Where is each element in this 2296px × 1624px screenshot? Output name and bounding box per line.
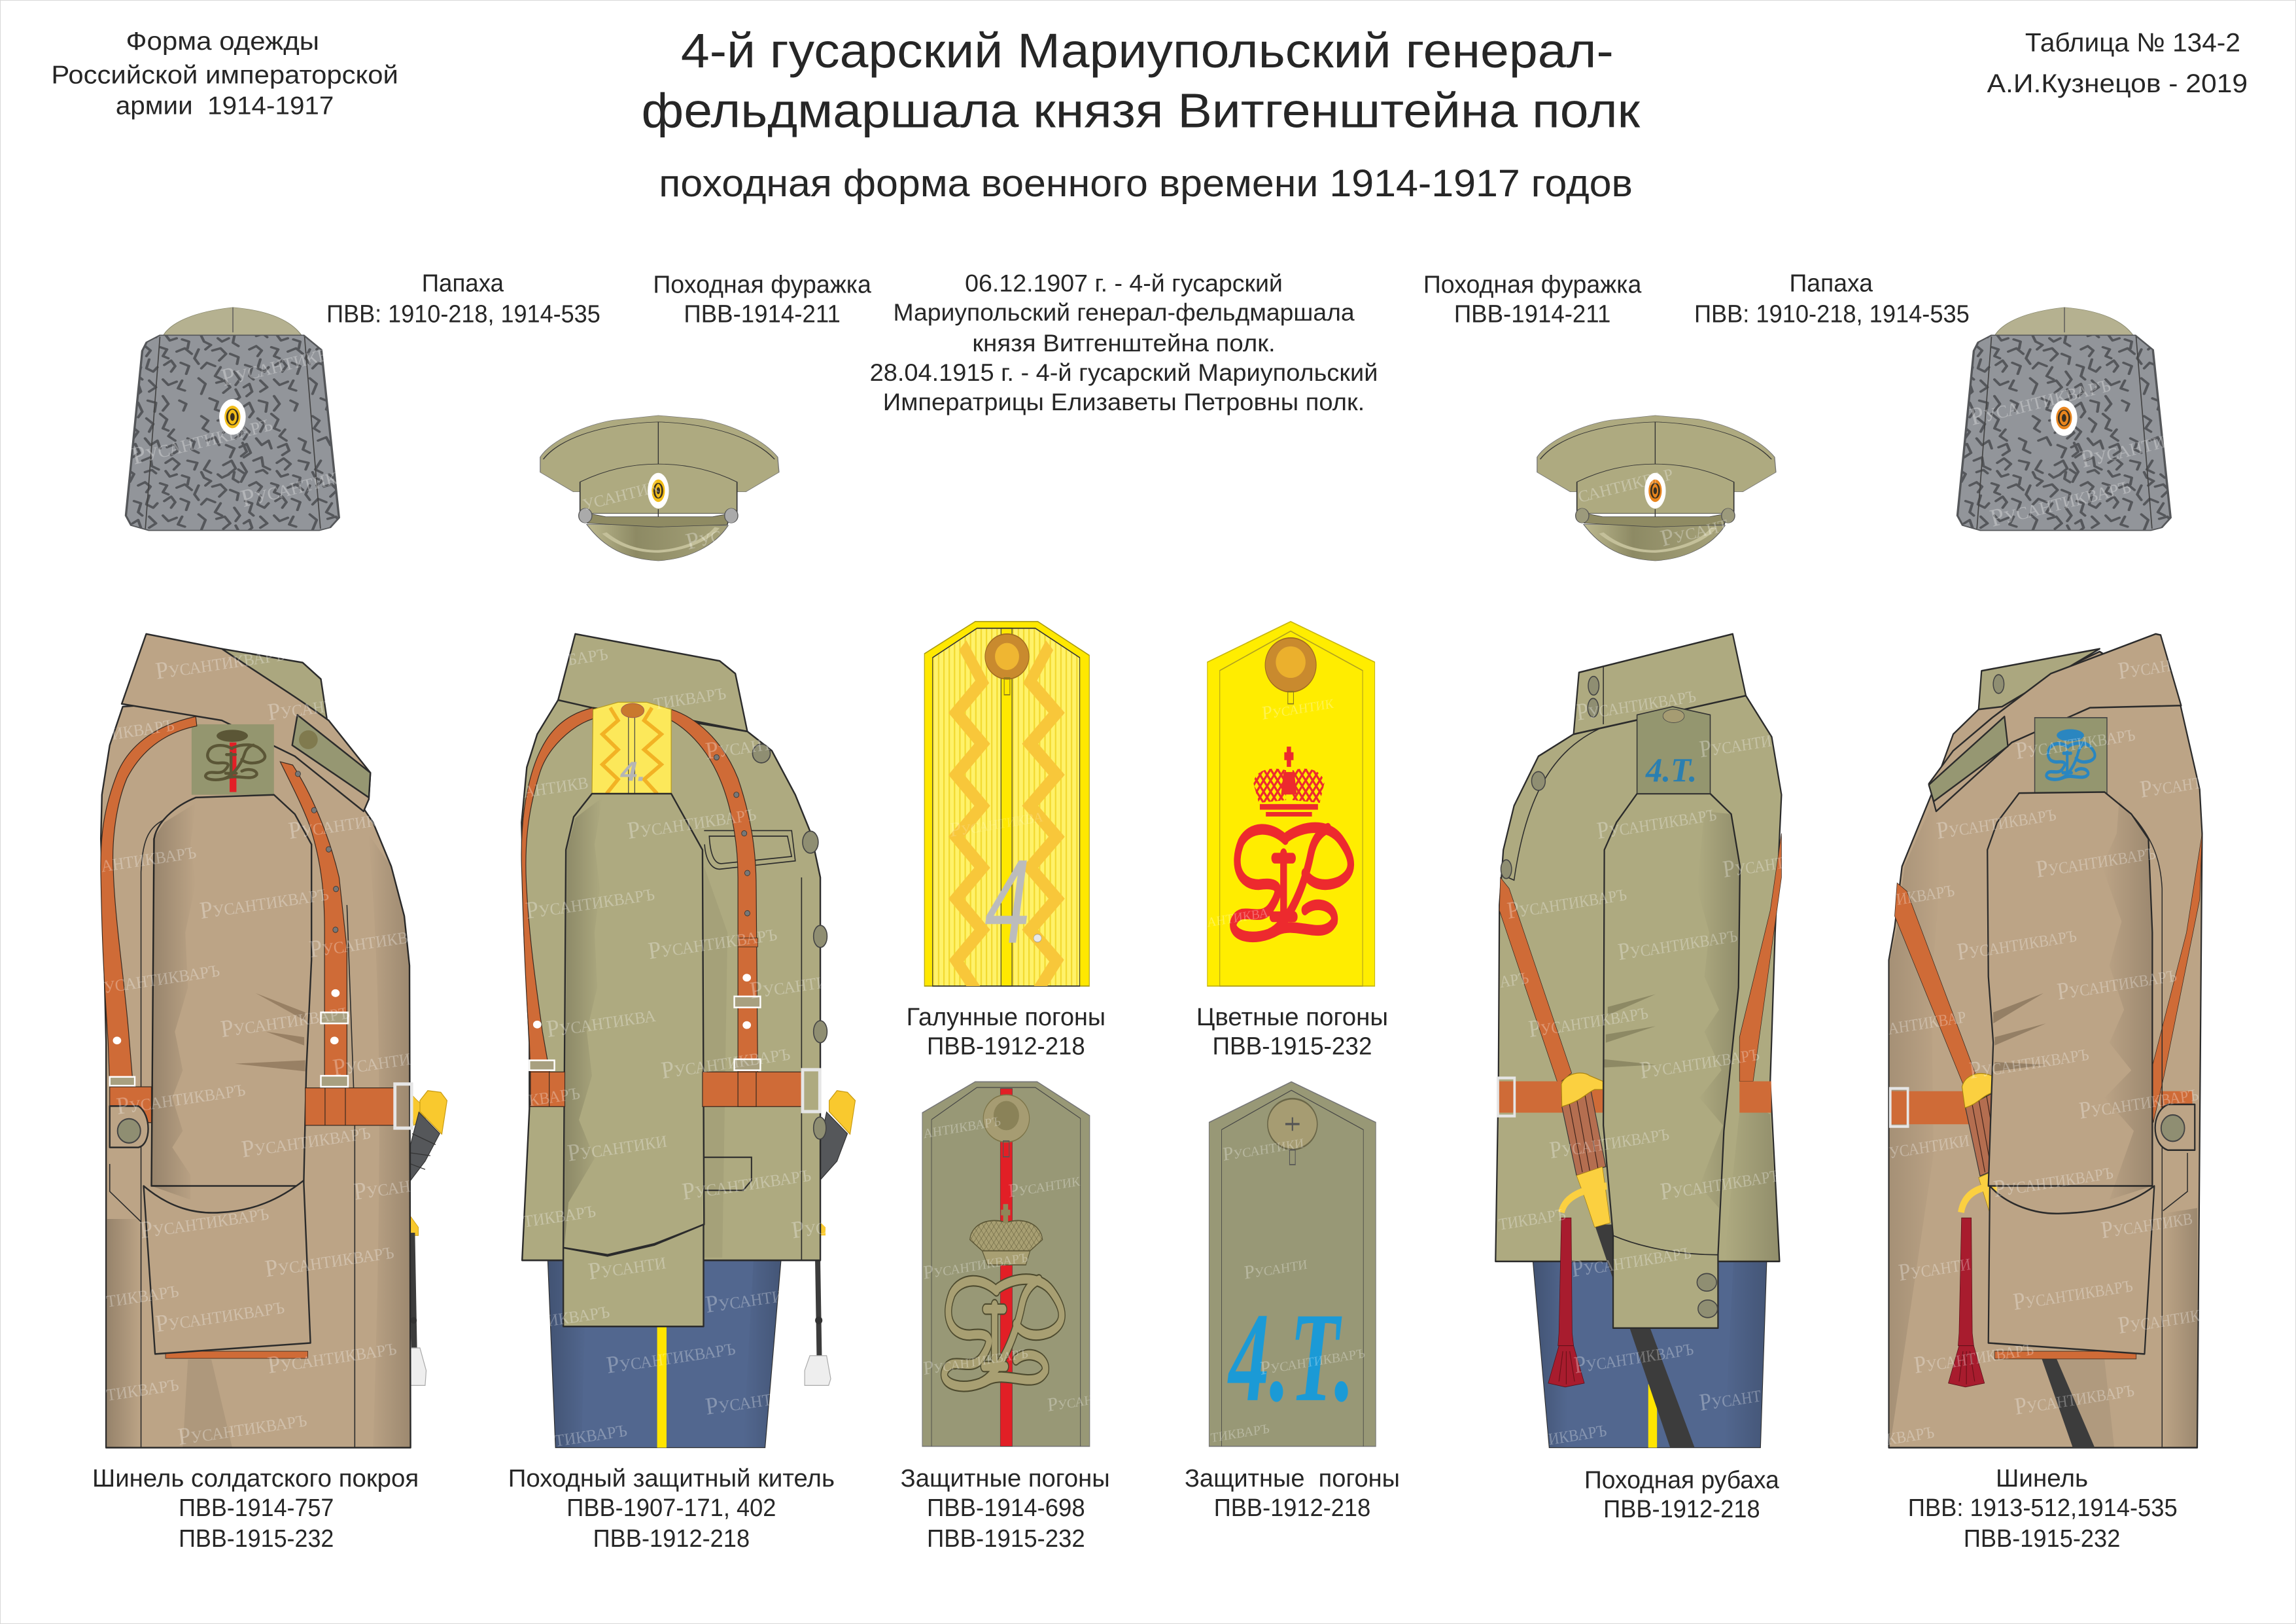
field epaulette with red stripe: Русантикваръ — [922, 1245, 1029, 1284]
watermarks: Русантикваръ — [219, 997, 351, 1042]
watermarks: Русантикваръ — [680, 1159, 812, 1205]
watermarks: Русантикваръ — [1992, 1157, 2115, 1203]
watermarks: кваръ — [1885, 1416, 1936, 1451]
epaulette labels middle: Галунные погоны — [907, 1004, 1105, 1031]
shoulder strap: 4.Т. — [1645, 751, 1697, 789]
watermarks: Русантикваръ — [1575, 680, 1697, 726]
braided-gold epaulette: 4 — [984, 836, 1030, 968]
bottom captions: ПВВ: 1913-512,1914-535 — [1908, 1494, 2178, 1522]
watermarks: Рус — [790, 1212, 827, 1244]
icon: crown — [970, 1204, 1043, 1265]
field epaulette with blue number: Русантики — [1222, 1131, 1304, 1165]
bottom captions: ПВВ-1915-232 — [927, 1525, 1085, 1553]
cipher — [945, 1279, 1062, 1386]
bottom captions: ПВВ-1912-218 — [1214, 1494, 1370, 1522]
left papakha: Русантикваръ — [238, 451, 384, 513]
watermarks: аръ — [1498, 962, 1530, 993]
watermarks — [1497, 680, 1786, 1451]
watermarks: Русантикваръ — [198, 878, 330, 924]
watermarks: Русанти — [1698, 725, 1773, 763]
bottom captions: ПВВ-1915-232 — [1964, 1525, 2120, 1553]
bottom captions: ПВВ-1914-757 — [179, 1494, 334, 1522]
lapel — [122, 634, 370, 811]
watermarks: Русантикваръ — [1570, 1237, 1692, 1282]
series heading, top left: Российской императорской — [51, 62, 398, 90]
field epaulette with red stripe — [922, 1082, 1094, 1446]
watermarks: Русантикваръ — [1548, 1118, 1671, 1164]
watermarks: Русантики — [566, 1125, 669, 1167]
watermarks: Русанти — [748, 966, 829, 1004]
watermarks: тикваръ — [553, 1415, 629, 1452]
cuff — [1989, 1186, 2154, 1354]
watermarks: Русантиква — [545, 1000, 657, 1042]
gold shoulder strap — [592, 702, 671, 794]
watermarks: тикваръ — [652, 677, 727, 715]
headgear labels: Папаха — [422, 270, 504, 297]
watermarks: Русант — [704, 728, 773, 764]
watermarks: икваръ — [109, 709, 176, 745]
trousers — [548, 1258, 781, 1447]
watermarks: икваръ — [1546, 1415, 1608, 1451]
cipher — [1233, 828, 1351, 937]
shirt body — [1495, 696, 1781, 1262]
right field cap: Русант — [1658, 510, 1730, 552]
field epaulette with red stripe: антикваръ — [922, 1109, 1001, 1143]
regiment history text: князя Витгенштейна полк. — [972, 330, 1276, 357]
watermarks: Русантикваръ — [1595, 799, 1718, 844]
watermarks: Русантик — [266, 686, 357, 726]
bottom captions: Походная рубаха — [1584, 1466, 1780, 1494]
greatcoat, left figure — [99, 634, 447, 1450]
subtitle: походная форма военного времени 1914-1917 годов — [659, 162, 1633, 205]
trousers — [1533, 1258, 1767, 1447]
title line 1: 4-й гусарский Мариупольский генерал- — [681, 24, 1614, 78]
icon: crown — [1253, 747, 1325, 817]
bottom captions: ПВВ-1914-698 — [927, 1494, 1085, 1522]
right papakha — [1956, 308, 2172, 531]
watermarks: баръ — [566, 638, 609, 671]
watermarks: Русантикваръ — [1935, 799, 2057, 844]
watermarks: Русантикваръ — [1639, 1038, 1761, 1084]
sword knot tassel — [1548, 1218, 1584, 1387]
regiment history text: 06.12.1907 г. - 4-й гусарский — [965, 270, 1283, 296]
watermarks: Русантикваръ — [1659, 1159, 1781, 1205]
regiment history text: Императрицы Елизаветы Петровны полк. — [883, 389, 1365, 415]
series heading, top left: армии 1914-1917 — [116, 92, 334, 120]
olive collar lining — [222, 649, 327, 720]
collar patch — [292, 715, 370, 798]
watermarks: Русантикваръ — [2034, 838, 2157, 883]
series heading, top left: Форма одежды — [126, 27, 319, 56]
gold shoulder strap: 4. — [620, 756, 646, 787]
half-belt button — [2155, 1104, 2195, 1150]
watermarks: Русантикваръ — [1955, 920, 2078, 966]
sabre hilt — [1561, 1073, 1610, 1227]
watermarks: тикваръ — [521, 1195, 597, 1233]
sleeve — [1603, 794, 1740, 1328]
watermarks: Русантикваръ — [138, 1198, 270, 1244]
watermarks: тикваръ — [104, 1369, 180, 1406]
watermarks: Русантикваръ — [240, 1117, 372, 1163]
shoulder straps — [101, 716, 197, 1087]
watermarks: Русантикваръ — [1506, 879, 1628, 925]
olive collar lining — [1979, 649, 2100, 709]
buttons — [752, 744, 827, 1139]
bottom captions: Защитные погоны — [1185, 1465, 1400, 1492]
field epaulette with blue number — [1209, 1082, 1376, 1447]
watermarks: Русант — [2138, 767, 2203, 803]
watermarks: Русантикваръ — [625, 798, 757, 844]
left field cap — [540, 415, 779, 561]
bottom captions: ПВВ-1912-218 — [1603, 1496, 1760, 1523]
straps — [521, 708, 593, 1076]
watermarks: Русантикваръ — [114, 1074, 247, 1120]
right papakha: Русантикваръ — [2078, 412, 2223, 474]
table number and author, top right — [1987, 27, 2248, 98]
headgear labels: ПВВ-1914-211 — [684, 300, 841, 328]
belt — [529, 754, 820, 1112]
sleeve — [1987, 792, 2152, 1186]
straps and belt — [1498, 834, 1781, 1116]
watermarks: Русанти — [704, 1382, 784, 1420]
watermarks: Русантикваръ — [266, 1333, 398, 1379]
field shirt with trousers — [1495, 634, 1786, 1451]
watermarks: Русант — [1721, 847, 1786, 883]
collar buttons — [1501, 677, 1599, 879]
bottom captions: Защитные погоны — [901, 1465, 1110, 1492]
watermarks — [521, 638, 829, 1452]
regiment history text — [870, 270, 1378, 415]
field epaulette with blue number: Русантикваръ — [1259, 1341, 1366, 1379]
watermarks: усантики — [1887, 1125, 1970, 1164]
coloured epaulette: антиква — [1206, 900, 1269, 932]
watermarks: Русантикваръ — [524, 878, 656, 924]
right field cap: сантиквар — [1574, 459, 1675, 508]
sleeve — [563, 794, 704, 1255]
watermarks: Русантикваръ — [2055, 960, 2178, 1005]
watermarks: Русантикваръ — [1968, 1038, 2090, 1084]
regiment history text: Мариупольский генерал-фельдмаршала — [893, 299, 1355, 326]
braided-gold epaulette: Русантиква — [949, 803, 1044, 841]
icon: sword hilt behind tunic — [805, 1091, 855, 1385]
field epaulette with blue number: тикваръ — [1209, 1416, 1270, 1447]
watermarks — [1885, 648, 2203, 1451]
watermarks: Русантикваръ — [1527, 997, 1650, 1043]
left papakha: Русантикваръ — [129, 409, 275, 470]
watermarks: Русантиква — [307, 920, 420, 962]
lapel — [1929, 634, 2181, 811]
watermarks: антиквар — [1886, 1001, 1967, 1040]
field epaulette with blue number: 4.Т. — [1227, 1286, 1355, 1428]
watermarks: Русант — [1698, 1380, 1762, 1416]
headgear labels: Папаха — [1789, 270, 1873, 297]
belt — [110, 771, 411, 1128]
field epaulette with red stripe: Русантикваръ — [922, 1341, 1029, 1379]
table number and author, top right: А.И.Кузнецов - 2019 — [1987, 69, 2248, 98]
bottom captions — [92, 1465, 2178, 1553]
field epaulette with blue number: Русанти — [1244, 1252, 1308, 1284]
watermarks: Русантикваръ — [2014, 719, 2136, 764]
headgear labels — [326, 270, 1970, 328]
bottom captions: Шинель солдатского покроя — [92, 1465, 419, 1492]
sabre hilt — [1961, 1074, 1997, 1214]
orange strap ends and cuff — [165, 1351, 308, 1358]
coloured epaulette — [1206, 622, 1375, 986]
watermarks: Русантик — [2117, 1299, 2202, 1339]
epaulette labels middle — [907, 1004, 1388, 1061]
sleeve — [152, 795, 311, 1186]
headgear labels: Походная фуражка — [653, 272, 872, 299]
left papakha: Русантикваръ — [218, 330, 364, 392]
watermarks: Русантикваръ — [659, 1038, 791, 1084]
bottom captions: ПВВ-1907-171, 402 — [566, 1494, 776, 1522]
coloured epaulette: Русантик — [1261, 691, 1334, 724]
epaulette labels middle: ПВВ-1915-232 — [1212, 1033, 1372, 1061]
lower pocket flap — [704, 1157, 752, 1190]
watermarks: тикваръ — [104, 1275, 180, 1313]
watermarks: Русан — [352, 1170, 411, 1205]
watermarks: Русантикваръ — [1616, 920, 1739, 966]
watermarks: кваръ — [527, 1077, 582, 1112]
watermarks: Русантикваръ — [605, 1333, 737, 1379]
headgear labels: Походная фуражка — [1423, 272, 1642, 299]
watermarks: Русантикваръ — [264, 1237, 395, 1282]
watermarks: Русантикваръ — [1573, 1333, 1695, 1379]
watermarks: Русанти — [1897, 1248, 1972, 1286]
collar patch — [1929, 716, 2008, 802]
cuff — [563, 1224, 704, 1326]
sword knot tassel — [1949, 1218, 1985, 1387]
regiment history text: 28.04.1915 г. - 4-й гусарский Мариупольский — [870, 359, 1378, 386]
headgear labels: ПВВ: 1910-218, 1914-535 — [326, 300, 600, 328]
watermarks: Русантикваръ — [2013, 1375, 2136, 1420]
straps and belt — [1890, 814, 2202, 1447]
scabbard — [1595, 1224, 1695, 1447]
greatcoat, right figure — [1885, 634, 2203, 1451]
bottom captions: ПВВ-1915-232 — [179, 1525, 334, 1553]
epaulette labels middle: ПВВ-1912-218 — [927, 1033, 1085, 1061]
watermarks — [99, 639, 420, 1450]
half-belt button — [110, 1106, 148, 1148]
watermarks: Русантик — [287, 805, 378, 844]
epaulette labels middle: Цветные погоны — [1196, 1004, 1388, 1031]
watermarks: Русантикваръ — [176, 1405, 308, 1450]
watermarks: антикваръ — [99, 836, 198, 877]
bottom captions: Походный защитный китель — [508, 1465, 835, 1492]
watermarks: Русантикваръ — [2078, 1078, 2200, 1124]
watermarks: икваръ — [1894, 875, 1956, 910]
watermarks: Русантикв — [2099, 1203, 2194, 1244]
right papakha: Русантикваръ — [1987, 471, 2133, 533]
bottom captions: ПВВ-1912-218 — [593, 1525, 750, 1553]
scabbard — [2041, 1357, 2095, 1447]
field epaulette with red stripe: Русантик — [1008, 1169, 1081, 1202]
watermarks: Русантикваръ — [154, 1292, 286, 1337]
shoulder strap with cipher — [192, 724, 274, 795]
chest pocket — [704, 830, 795, 869]
watermarks: Русантикваръ — [646, 919, 778, 964]
left papakha — [124, 308, 340, 531]
watermarks: Русантикваръ — [154, 639, 286, 684]
right papakha: Русантикваръ — [1967, 370, 2113, 431]
collar — [1574, 634, 1746, 734]
shoulder strap — [1637, 707, 1710, 794]
watermarks: антикв — [521, 767, 589, 803]
watermarks: Русанти — [587, 1247, 667, 1285]
headgear labels: ПВВ: 1910-218, 1914-535 — [1694, 300, 1970, 328]
headgear labels: ПВВ-1914-211 — [1454, 300, 1610, 328]
title block — [641, 24, 1641, 205]
watermarks: Русанти — [704, 1280, 784, 1318]
watermarks: тикваръ — [1497, 1198, 1567, 1235]
field epaulette with red stripe: Русан — [1047, 1387, 1094, 1416]
watermarks: Русант — [2117, 648, 2181, 684]
left field cap: усантик — [579, 471, 661, 516]
watermarks: Русанти — [331, 1043, 412, 1081]
right field cap — [1537, 415, 1776, 561]
watermarks: икваръ — [545, 1296, 611, 1332]
braided-gold epaulette — [924, 622, 1089, 992]
left field cap: Рус — [683, 521, 724, 555]
tunic body — [521, 700, 820, 1260]
watermarks: усантикваръ — [101, 955, 221, 998]
tunic with trousers — [521, 634, 855, 1452]
icon: sword hilt behind coat — [409, 1091, 447, 1385]
title line 2: фельдмаршала князя Витгенштейна полк — [641, 84, 1641, 138]
coat body — [101, 696, 411, 1447]
series heading, top left — [51, 27, 398, 120]
bottom captions: Шинель — [1996, 1465, 2088, 1492]
watermarks: Русантикваръ — [1913, 1333, 2035, 1379]
tunic collar — [558, 634, 747, 732]
shoulder strap with blue cipher — [2035, 718, 2107, 794]
table number and author, top right: Таблица № 134-2 — [2025, 27, 2240, 57]
watermarks: Русантикваръ — [2011, 1270, 2134, 1315]
coat body — [1889, 652, 2202, 1447]
